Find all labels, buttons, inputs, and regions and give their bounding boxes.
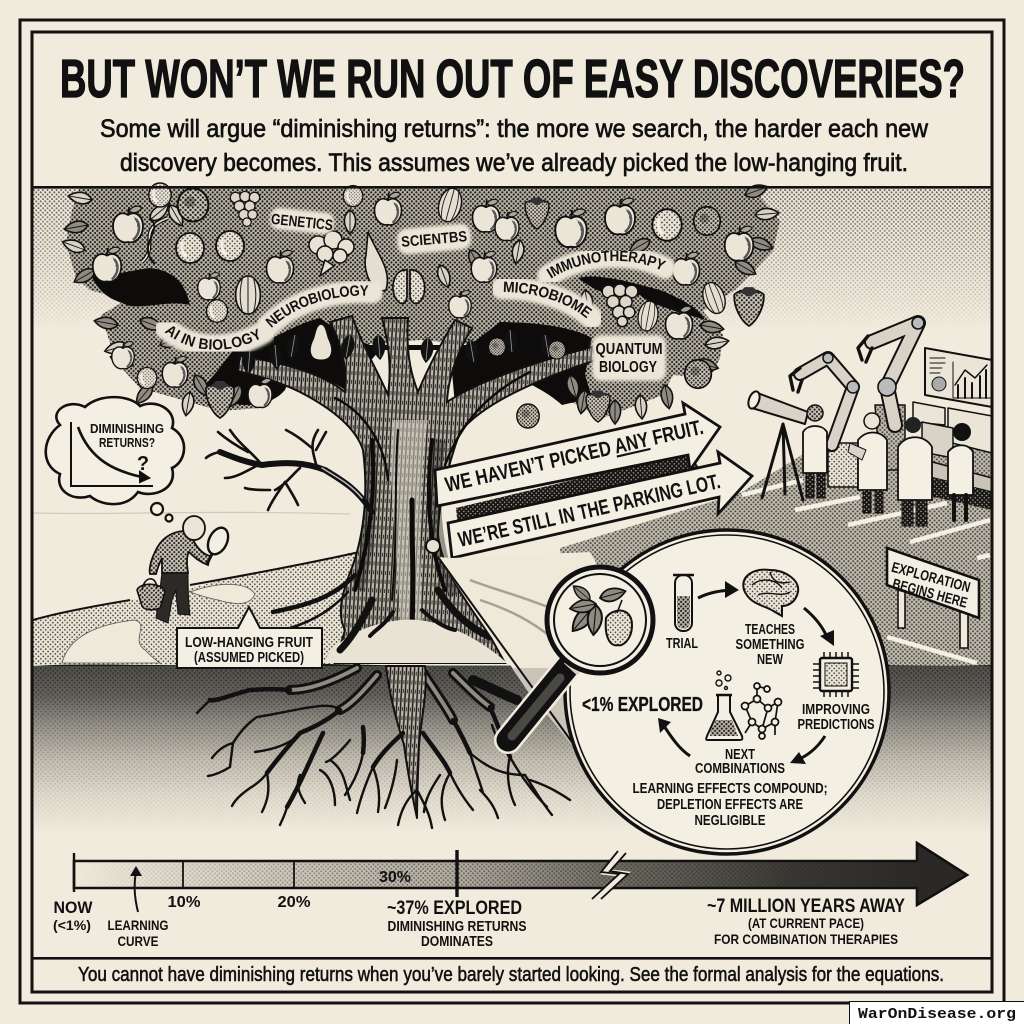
cauliflower brain [309, 231, 354, 276]
arrow banner: we haven't picked any fruit: WE HAVEN’T PICKED ANY FRUIT. [443, 416, 706, 497]
label: 30 percent: 30% [379, 869, 411, 886]
label: next combinations: COMBINATIONS [695, 761, 785, 777]
research field labels on the tree [156, 205, 676, 384]
label: QUANTUM BIOLOGY: QUANTUM [596, 341, 662, 358]
parking lot [560, 447, 992, 668]
arrow banner: still in the parking lot: WE’RE STILL IN THE PARKING LOT. [456, 470, 722, 552]
label: teaches something new: NEW [757, 652, 783, 668]
bubble text [90, 421, 164, 475]
icon: flask [706, 671, 742, 740]
tick marks [74, 850, 457, 897]
tree [61, 181, 780, 828]
timeline bar arrow [53, 843, 967, 950]
thought bubble: diminishing returns [46, 397, 184, 522]
bubble text: RETURNS? [99, 435, 155, 450]
label: next combinations [695, 747, 785, 777]
bark lines [335, 372, 530, 625]
label: next combinations: NEXT [725, 747, 755, 763]
old man with magnifying glass and basket [137, 516, 232, 623]
label: MICROBIOME: MICROBIOME [504, 282, 592, 318]
timeline halftone [75, 845, 965, 903]
learning curve arrow and label [108, 866, 169, 949]
label: teaches something new: SOMETHING [736, 637, 804, 653]
bare patches on hillside [62, 584, 255, 663]
root flares on mound [273, 575, 490, 650]
soil halftone overlay [33, 666, 991, 834]
trunk light centre [391, 420, 428, 625]
roots [197, 666, 570, 828]
parking lot lines [742, 480, 990, 663]
striped fruit [365, 232, 387, 291]
label: improving predictions [798, 702, 875, 733]
scientist at console [898, 417, 932, 526]
trunk and branches [238, 316, 596, 663]
label: GENETICS: GENETICS [270, 211, 334, 234]
fruits [93, 183, 764, 428]
label: improving predictions: PREDICTIONS [798, 717, 875, 733]
header divider [33, 186, 991, 189]
label: 20 percent: 20% [278, 894, 310, 911]
label: 37 percent explored: DIMINISHING RETURNS [388, 919, 527, 935]
conclusion text: NEGLIGIBLE [694, 812, 766, 829]
thick root highlights [290, 668, 490, 720]
hill top grass line [33, 552, 360, 620]
lightning break outline [592, 851, 628, 899]
scientist with clipboard [848, 413, 887, 513]
DNA helix [142, 218, 168, 264]
label: now: NOW [54, 898, 93, 917]
label: 7 million years away: FOR COMBINATION THERAPIES [714, 931, 898, 947]
telescope on tripod [746, 390, 808, 500]
arrow: brain to chip [804, 608, 834, 646]
arrow: chip to combinations [790, 736, 825, 764]
callout: low-hanging fruit [177, 607, 322, 668]
label: NEUROBIOLOGY: NEUROBIOLOGY [265, 285, 368, 328]
bark shading at trunk edges [358, 440, 455, 595]
soil [33, 663, 991, 834]
research team in the parking lot [746, 317, 992, 526]
black shadow under canopy [200, 318, 592, 405]
scientist with telescope [803, 405, 827, 498]
test tube [673, 575, 694, 631]
robot arm two [858, 317, 924, 470]
bubble text: ? [137, 453, 149, 475]
label: teaches something new: TEACHES [745, 622, 795, 638]
sign: exploration begins here [887, 548, 979, 648]
label: AI IN BIOLOGY: AI IN BIOLOGY [164, 326, 259, 350]
label: 7 million years away: ~7 MILLION YEARS AWAY [707, 896, 905, 917]
hillside ground [33, 550, 370, 665]
subtitle [100, 115, 929, 177]
label: 7 million years away [707, 896, 905, 947]
label: 7 million years away: (AT CURRENT PACE) [748, 915, 864, 931]
scientist with dark hair [948, 423, 973, 520]
mini diminishing returns chart [71, 422, 153, 486]
icon: brain [743, 570, 798, 616]
label: improving predictions: IMPROVING [802, 702, 870, 718]
thought trail circles [151, 503, 172, 522]
label: 37 percent explored: ~37% EXPLORED [387, 898, 522, 919]
sign: exploration begins here: EXPLORATION [890, 560, 972, 596]
black shadow upper left [90, 268, 190, 306]
icon: magnifying glass [508, 567, 653, 740]
magnified circle: learning loop [565, 530, 889, 854]
icon: molecule [742, 683, 782, 739]
label: teaches something new [736, 622, 804, 668]
label: SCIENTBS: SCIENTBS [401, 228, 468, 251]
brain fruit [393, 270, 425, 303]
label: 10 percent: 10% [168, 894, 200, 911]
subtitle: Some will argue “diminishing returns”: the more we search, the harder each new [100, 115, 929, 143]
label: QUANTUM BIOLOGY: BIOLOGY [599, 359, 658, 376]
label: QUANTUM BIOLOGY [592, 335, 666, 381]
label: IMMUNOTHERAPY: IMMUNOTHERAPY [546, 250, 666, 278]
callout: low-hanging fruit: (ASSUMED PICKED) [194, 649, 304, 666]
lightning break [597, 852, 624, 898]
label: trial: TRIAL [666, 636, 698, 652]
zoom wedge from tree to lens [426, 539, 640, 767]
faint paper fold [33, 512, 990, 514]
illustration scene background [33, 188, 992, 834]
wall monitor with chart [925, 348, 992, 407]
label: now: (<1%) [53, 917, 91, 933]
canopy mass [66, 188, 780, 418]
conclusion text [632, 780, 828, 829]
watermark: WarOnDisease.org [858, 1006, 1016, 1023]
header: title and subtitle [60, 49, 965, 177]
label: now [53, 898, 93, 933]
label: under 1 percent explored: <1% EXPLORED [582, 694, 703, 716]
ground mound over trunk base [323, 620, 507, 663]
callout: low-hanging fruit: LOW-HANGING FRUIT [185, 634, 313, 651]
label: 37 percent explored [387, 898, 527, 950]
conclusion text: LEARNING EFFECTS COMPOUND; [632, 780, 828, 797]
label: 37 percent explored: DOMINATES [421, 934, 493, 950]
watermark [850, 1002, 1024, 1024]
thick root outlines [290, 668, 517, 720]
dark ribbon between arrow banners [456, 452, 700, 528]
icon: microchip [813, 652, 859, 697]
broken left branch [206, 430, 372, 512]
bubble text: DIMINISHING [90, 421, 164, 436]
robot arm one [790, 353, 859, 487]
label: SCIENTBS [396, 223, 472, 255]
thin rootlets [197, 700, 570, 828]
arrow: trial to brain [698, 581, 739, 598]
sign: exploration begins here: BEGINS HERE [890, 576, 969, 612]
medium roots [210, 689, 510, 807]
conclusion text: DEPLETION EFFECTS ARE [657, 796, 803, 813]
subtitle: discovery becomes. This assumes we’ve already picked the low-hanging fruit. [120, 149, 908, 177]
console with small screens [913, 402, 992, 510]
sky halftone [34, 188, 990, 322]
learning curve arrow and label: LEARNING [108, 917, 169, 933]
learning curve arrow and label: CURVE [118, 933, 158, 949]
black shadow right of immunotherapy [578, 276, 705, 320]
leaf clusters [61, 181, 779, 424]
tap root [386, 666, 426, 818]
arrow: combinations to explored [658, 718, 690, 756]
